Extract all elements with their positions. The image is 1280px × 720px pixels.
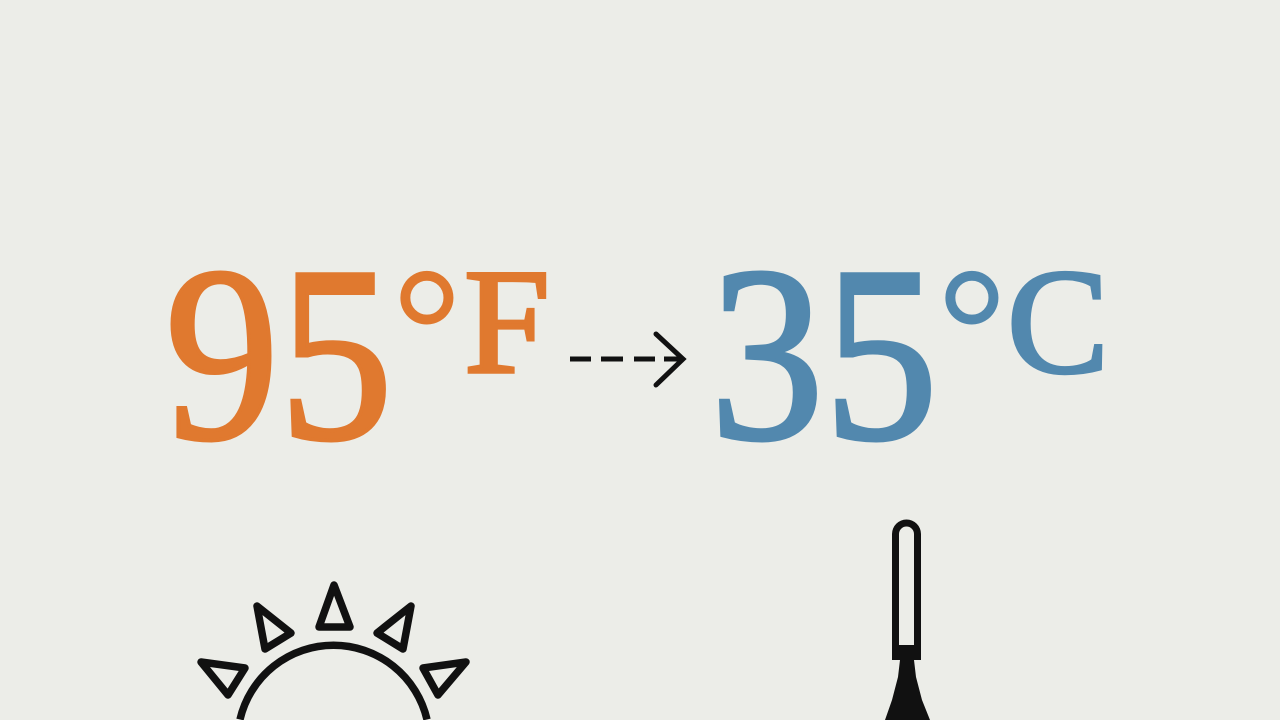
heading: 35 degrees Celsius: C	[1007, 239, 1109, 405]
arrow: dashed conversion arrow	[570, 334, 683, 385]
heading: 95 degrees Fahrenheit	[165, 216, 550, 493]
heading: 95 degrees Fahrenheit: 95	[165, 216, 393, 493]
heading: 35 degrees Celsius	[710, 216, 1109, 493]
heading: 95 degrees Fahrenheit: °	[393, 234, 461, 424]
heading: 35 degrees Celsius: °	[938, 234, 1006, 424]
icon: thermometer	[885, 520, 930, 720]
heading: 95 degrees Fahrenheit: F	[464, 239, 550, 405]
heading: 35 degrees Celsius: 35	[710, 216, 938, 493]
icon: sun	[201, 585, 466, 720]
